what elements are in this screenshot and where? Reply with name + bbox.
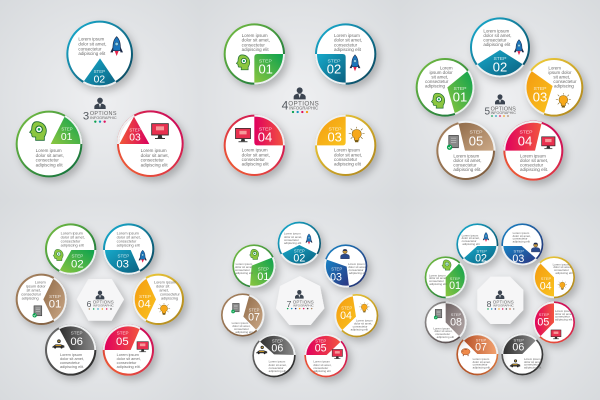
center heptagon: OPTIONS (293, 300, 314, 305)
icon: head (53, 249, 63, 261)
panel: 5 options (416, 17, 583, 181)
text block: Lorem ipsum (553, 262, 570, 266)
text block: dolor sit amet, (232, 324, 251, 328)
panel: 3 options (16, 21, 184, 177)
step 03 circle: STEP (513, 248, 524, 253)
text block: adipiscing elit (117, 244, 141, 248)
step 05 circle (436, 121, 495, 180)
text block: Lorem ipsum (117, 232, 139, 236)
text block: adipiscing elit (555, 271, 573, 275)
center emblem: 4 (282, 98, 289, 112)
step 03 circle: STEP (129, 127, 141, 132)
step 01 circle (16, 274, 67, 325)
text block: adipiscing (161, 297, 178, 301)
text block: consectetur (21, 293, 42, 297)
step 03 circle (315, 115, 376, 176)
text block: consectetur (160, 293, 181, 297)
text block: consectetur (425, 79, 449, 84)
text block: Lorem ipsum (141, 148, 167, 153)
step 01 circle: 01 (258, 61, 273, 76)
text block: dolor sit (156, 285, 170, 289)
text block: dolor sit amet, (354, 322, 372, 326)
text block: consectetur (141, 158, 164, 163)
step 04 circle: 04 (138, 298, 151, 310)
center emblem: 3 (83, 110, 89, 122)
icon: rocket (483, 232, 489, 242)
step 02 circle (470, 17, 530, 77)
icon: document (231, 303, 239, 313)
panel: 4 options (224, 23, 376, 176)
step 01 circle: STEP (450, 276, 461, 281)
text block: consectetur (429, 279, 444, 283)
center emblem: INFOGRAPHIC (289, 105, 318, 110)
text block: dolor sit amet, (334, 38, 362, 43)
step 02 circle: 02 (94, 74, 105, 85)
step 02 circle: 02 (493, 59, 507, 74)
text block: consectetur (473, 363, 488, 367)
text block: adipiscing elit (349, 271, 366, 275)
step 05 circle: 05 (537, 316, 549, 328)
icon: motorbike (256, 346, 267, 354)
step 01 circle (224, 23, 285, 85)
step 05 circle: STEP (469, 129, 483, 135)
step 02 circle (45, 223, 96, 275)
text block: dolor sit amet, (483, 33, 512, 38)
icon: document (434, 309, 442, 319)
text block: Lorem ipsum (473, 357, 490, 361)
text block: Lorem ipsum (284, 232, 301, 236)
text block: ipsum dolor (429, 70, 453, 75)
step 05 circle: STEP (117, 331, 129, 336)
text block: Lorem (35, 281, 46, 285)
text block: adipiscing elit (429, 282, 447, 286)
step 03 circle (501, 223, 543, 265)
text block: Lorem ipsum (520, 153, 546, 158)
icon: monitor (137, 342, 148, 352)
text block: Lorem (440, 66, 453, 71)
text block: Lorem ipsum (334, 148, 360, 153)
text block: dolor sit amet, (334, 152, 362, 157)
text block: amet, (159, 289, 169, 293)
icon: motorbike (510, 359, 520, 367)
text block: consectetur (60, 361, 81, 365)
text block: ipsum dolor (548, 70, 572, 75)
center emblem (282, 87, 319, 113)
text block: consectetur (524, 363, 539, 367)
step 01 circle (232, 244, 276, 288)
text block: Lorem ipsum (453, 153, 480, 158)
step 06 circle (45, 324, 96, 376)
step 05 circle (533, 301, 575, 343)
text block: dolor sit amet, (513, 234, 531, 238)
step 02 circle (315, 23, 376, 85)
text block: Lorem ipsum (433, 326, 451, 330)
step 04 circle (335, 294, 378, 337)
text block: Lorem ipsum (242, 148, 268, 153)
step 01 circle: STEP (49, 294, 61, 299)
text block: adipiscing elit (242, 162, 269, 167)
text block: adipiscing elit (78, 51, 106, 56)
text block: Lorem ipsum (513, 231, 530, 235)
text block: consectetur (520, 162, 544, 167)
step 01 circle (16, 111, 82, 177)
icon: head (236, 55, 250, 70)
center octagon: 8 (487, 299, 492, 309)
step 03 circle: STEP (328, 126, 342, 132)
text block: adipiscing (22, 297, 39, 301)
text block: Lorem ipsum (524, 357, 541, 361)
text block: consectetur (483, 38, 507, 43)
text block: consectetur (349, 268, 364, 272)
step 02 circle: STEP (476, 248, 487, 253)
text block: dolor sit amet, (434, 329, 453, 333)
step 01 circle: STEP (258, 267, 269, 272)
step 03 circle: 03 (533, 90, 547, 105)
text block: adipiscing elit (235, 330, 253, 334)
text block: adipiscing elit (483, 42, 511, 47)
step 06 circle: STEP (272, 338, 283, 343)
step 02 circle: 02 (71, 259, 84, 271)
text block: ipsum dolor (26, 285, 46, 289)
center emblem: OPTIONS (90, 111, 117, 117)
text block: consectetur (235, 268, 250, 272)
text block: dolor sit amet, (555, 312, 573, 316)
step 05 circle: STEP (539, 312, 550, 317)
step 02 circle: STEP (493, 56, 507, 62)
step 04 circle (133, 274, 184, 325)
panel: 8 options (425, 223, 575, 375)
step 06 circle: STEP (71, 331, 83, 336)
text block: adipiscing elit. (117, 365, 141, 369)
text block: adipiscing elit (334, 162, 362, 167)
text block: adipiscing elit (242, 47, 269, 52)
step 02 circle: 02 (327, 61, 341, 76)
icon: rocket (306, 234, 312, 244)
icon: rocket (139, 250, 147, 263)
step 01 circle: STEP (453, 86, 467, 92)
step 03 circle (103, 223, 154, 275)
step 08 circle (425, 301, 467, 343)
text block: dolor sit amet, (60, 357, 84, 361)
text block: dolor sit amet, (473, 360, 491, 364)
text block: Lorem ipsum (60, 353, 82, 357)
text block: dolor sit amet, (141, 153, 169, 158)
icon: bulb (349, 127, 365, 142)
text block: Lorem ipsum (334, 33, 360, 38)
step 03 circle (324, 244, 367, 288)
center emblem: INFOGRAPHIC (491, 111, 516, 115)
step 02 circle: STEP (327, 58, 341, 64)
text block: adipiscing elit (555, 317, 572, 321)
text block: adipiscing elit (334, 47, 362, 52)
center octagon (477, 277, 523, 324)
text block: dolor sit amet, (235, 265, 253, 269)
step 02 circle (278, 222, 321, 265)
panel: 6 options (16, 223, 184, 376)
panel: 7 options (221, 222, 378, 377)
step 04 circle (224, 115, 285, 176)
center hexagon: 6 (87, 299, 92, 309)
step 01 circle (416, 58, 474, 117)
text block: Lorem ipsum (78, 37, 105, 42)
step 07 circle: STEP (476, 338, 487, 343)
text block: adipiscing elit (351, 328, 368, 332)
icon: rocket (110, 37, 123, 56)
step 02 circle: STEP (94, 69, 105, 74)
step 01 circle: 01 (49, 298, 61, 310)
step 02 circle (456, 223, 498, 265)
step 05 circle (304, 334, 348, 377)
icon: head (30, 122, 46, 140)
text block: adipiscing elit (269, 369, 286, 373)
text block: Lorem ipsum (117, 353, 139, 357)
text block: consectetur (61, 240, 81, 244)
step 06 circle (252, 334, 296, 377)
center emblem: 5 (485, 106, 491, 117)
text block: consectetur (269, 366, 284, 370)
step 03 circle: STEP (117, 254, 129, 259)
step 04 circle: 04 (258, 129, 272, 144)
text block: dolor sit amet, (242, 152, 270, 157)
step 04 circle: STEP (541, 276, 552, 281)
text block: consectetur (36, 158, 59, 163)
step 08 circle: 08 (450, 316, 462, 328)
center emblem (485, 94, 516, 117)
text block: dolor sit amet, (462, 236, 480, 240)
text block: dolor sit amet, (553, 265, 572, 269)
text block: adipiscing elit. (60, 365, 84, 369)
center octagon: INFOGRAPHIC (493, 304, 515, 308)
step 04 circle: STEP (519, 129, 533, 135)
text block: adipiscing elit (61, 244, 85, 248)
text block: dolor sit amet, (348, 265, 367, 269)
text block: consectetur (234, 327, 249, 331)
text block: sit amet, (27, 289, 41, 293)
step 07 circle: 07 (475, 342, 487, 354)
icon: bulb (359, 302, 369, 312)
step 03 circle: 03 (330, 271, 342, 283)
icon: motorbike (52, 339, 64, 349)
step 07 circle: STEP (249, 308, 260, 313)
text block: consectetur (78, 46, 102, 51)
center octagon: OPTIONS (493, 300, 514, 305)
icon: monitor (551, 330, 561, 339)
text block: dolor sit amet, (36, 153, 64, 158)
icon: document (447, 135, 458, 150)
step 02 circle: STEP (294, 248, 305, 253)
step 01 circle: 01 (257, 271, 269, 283)
step 01 circle: STEP (259, 58, 273, 64)
text block: Lorem ipsum (483, 29, 510, 34)
step 01 circle: 01 (449, 280, 461, 292)
text block: Lorem ipsum (236, 262, 253, 266)
text block: Lorem ipsum (154, 281, 176, 285)
text block: consectetur (334, 42, 358, 47)
text block: Lorem ipsum (555, 309, 572, 313)
text block: consectetur (553, 79, 577, 84)
step 03 circle: STEP (533, 86, 547, 92)
text block: dolor sit amet, (520, 158, 548, 163)
center heptagon (276, 276, 324, 325)
icon: person (531, 243, 540, 252)
center emblem: INFOGRAPHIC (90, 116, 117, 120)
step 03 circle: 03 (327, 129, 342, 144)
text block: adipiscing elit (235, 271, 253, 275)
text block: Lorem ipsum (242, 33, 268, 38)
text block: adipiscing elit (473, 365, 490, 369)
text block: dolor sit amet, (453, 158, 482, 163)
text block: consectetur (554, 268, 569, 272)
icon: monitor (542, 137, 555, 149)
icon: monitor (332, 349, 342, 359)
step 04 circle: STEP (139, 294, 151, 299)
step 05 circle: 05 (315, 343, 327, 355)
text block: adipiscing elit (524, 365, 541, 369)
center emblem: OPTIONS (288, 100, 319, 107)
step 02 circle: STEP (71, 254, 83, 259)
step 02 circle: 02 (293, 253, 305, 265)
step 04 circle (533, 256, 575, 298)
text block: adipiscing elit (513, 239, 530, 243)
text block: dolor sit amet, (284, 235, 302, 239)
step 01 circle: 01 (453, 90, 467, 105)
center emblem: OPTIONS (491, 106, 516, 112)
text block: dolor sit amet, (78, 41, 107, 46)
text block: sit amet, (431, 74, 448, 79)
step 04 circle: 04 (540, 280, 552, 292)
text block: dolor sit amet, (117, 357, 141, 361)
step 01 circle: STEP (61, 127, 73, 132)
icon: head (431, 93, 445, 108)
text block: Lorem ipsum (36, 148, 62, 153)
text block: consectetur (117, 240, 137, 244)
text block: consectetur (353, 325, 368, 329)
icon: head (250, 249, 259, 259)
text block: consectetur (555, 315, 570, 319)
text block: dolor sit amet, (269, 363, 287, 367)
step 05 circle (103, 324, 154, 376)
text block: adipiscing elit (313, 369, 331, 373)
icon: document (32, 306, 42, 318)
step 03 circle: STEP (331, 267, 342, 272)
step 03 circle: 03 (129, 133, 141, 144)
step 08 circle: STEP (451, 312, 462, 317)
step 05 circle: 05 (116, 336, 129, 348)
text block: consectetur (242, 42, 265, 47)
step 03 circle: 03 (512, 253, 524, 265)
step 04 circle: STEP (259, 126, 273, 132)
step 04 circle (503, 121, 563, 181)
text block: consectetur (313, 366, 328, 370)
icon: monitor (235, 128, 250, 142)
step 04 circle: STEP (341, 306, 352, 311)
text block: dolor sit amet, (313, 363, 332, 367)
step 02 circle: 02 (475, 253, 487, 265)
text block: Lorem ipsum (269, 360, 286, 364)
text block: Lorem ipsum (313, 360, 331, 364)
step 07 circle (221, 293, 264, 337)
text block: consectetur (435, 332, 450, 336)
icon: monitor (152, 124, 168, 139)
text block: sit amet, (553, 74, 570, 79)
step 06 circle: STEP (513, 338, 524, 343)
step 07 circle: 07 (248, 312, 260, 324)
step 06 circle: 06 (70, 336, 83, 348)
icon: rocket (350, 55, 360, 71)
text block: adipiscing elit (284, 241, 301, 245)
text block: adipiscing elit. (453, 167, 482, 172)
center emblem (83, 98, 117, 123)
text block: dolor sit amet, (242, 38, 270, 43)
step 06 circle: 06 (512, 342, 524, 354)
step 06 circle (501, 333, 543, 375)
text block: Lorem ipsum (429, 273, 446, 277)
step 07 circle (456, 333, 498, 375)
text block: consectetur (117, 361, 137, 365)
icon: bulb (158, 303, 170, 315)
text block: Lorem ipsum (356, 319, 373, 323)
icon: head (442, 260, 451, 270)
text block: adipiscing elit (36, 162, 63, 167)
text block: consectetur (284, 238, 299, 242)
step 03 circle (117, 110, 184, 177)
text block: adipiscing (425, 83, 445, 88)
step 04 circle: 04 (340, 310, 352, 322)
center hexagon (77, 279, 124, 321)
center hexagon: OPTIONS (93, 300, 114, 305)
icon: piggy bank (461, 348, 470, 356)
icon: rocket (514, 40, 524, 55)
step 06 circle: 06 (271, 343, 283, 355)
text block: adipiscing elit. (520, 167, 548, 172)
text block: adipiscing elit (141, 162, 168, 167)
center heptagon: INFOGRAPHIC (293, 304, 315, 308)
step 03 circle (525, 58, 583, 117)
step 02 circle (66, 21, 133, 87)
text block: consectetur (513, 237, 528, 241)
text block: consectetur (453, 162, 477, 167)
text block: Lorem (548, 66, 561, 71)
step 04 circle: 04 (518, 134, 532, 149)
text block: dolor sit amet, (61, 236, 85, 240)
text block: dolor sit amet, (524, 360, 542, 364)
center heptagon: 7 (287, 299, 292, 309)
icon: person (341, 249, 349, 259)
text block: Lorem ipsum (348, 262, 365, 266)
text block: dolor sit amet, (117, 236, 141, 240)
step 05 circle: 05 (469, 134, 483, 149)
text block: Lorem ipsum (61, 232, 83, 236)
icon: bulb (558, 281, 567, 290)
icon: bulb (556, 93, 571, 108)
text block: Lorem ipsum (462, 233, 479, 237)
center hexagon: INFOGRAPHIC (93, 304, 115, 308)
step 01 circle: 01 (61, 132, 73, 143)
text block: Lorem ipsum (232, 321, 249, 325)
text block: adipiscing elit (462, 242, 480, 246)
step 01 circle (425, 256, 467, 298)
text block: adipiscing (554, 83, 574, 88)
text block: consectetur (242, 157, 265, 162)
step 03 circle: 03 (116, 259, 129, 271)
text block: adipiscing elit (437, 335, 454, 339)
text block: dolor sit amet, (429, 276, 447, 280)
text block: consectetur (462, 239, 477, 243)
text block: consectetur (334, 157, 358, 162)
step 05 circle: STEP (315, 338, 326, 343)
